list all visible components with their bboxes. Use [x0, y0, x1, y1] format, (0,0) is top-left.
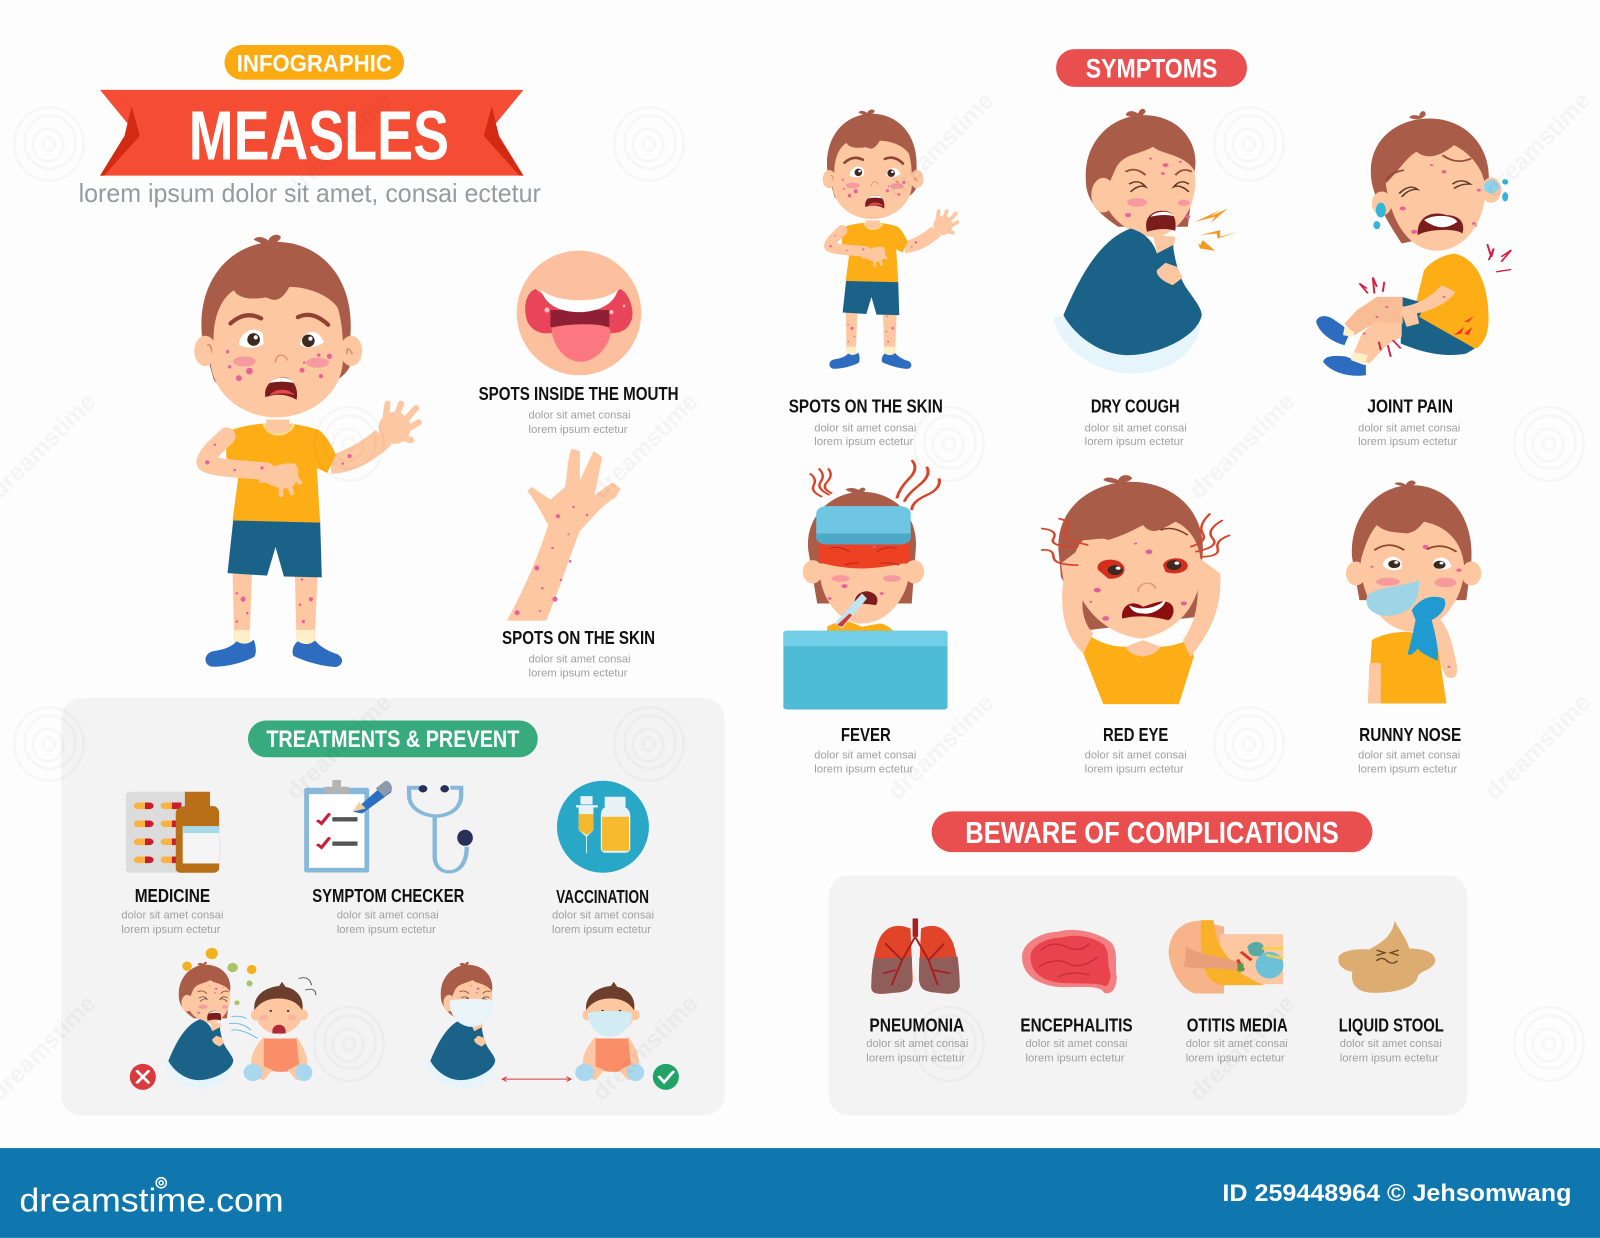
caption: medicine: MEDICINE — [135, 885, 210, 906]
caption: vaccination: dolor sit amet consai — [552, 909, 654, 921]
caption: dry cough: dolor sit amet consai — [1085, 423, 1187, 435]
caption: medicine — [121, 885, 223, 936]
text: dreamstime — [587, 388, 703, 504]
caption: liquid stool — [1339, 1015, 1444, 1064]
icon: symptom checker clipboard and stethoscope — [304, 780, 473, 872]
caption: red eye — [1085, 724, 1187, 776]
caption: liquid stool: dolor sit amet consai — [1340, 1038, 1442, 1050]
symptom illustration: red eye — [1041, 475, 1230, 704]
panel: complications background — [829, 876, 1467, 1115]
caption: spots on the skin symptom: dolor sit amet consai — [814, 423, 916, 435]
caption: symptom checker: dolor sit amet consai — [337, 909, 439, 921]
caption: encephalitis — [1020, 1015, 1133, 1064]
caption: dry cough — [1085, 395, 1187, 448]
caption: encephalitis: dolor sit amet consai — [1026, 1038, 1128, 1050]
caption: red eye: RED EYE — [1103, 724, 1168, 745]
icon: arm with spots — [507, 449, 621, 621]
caption: spots on the skin: dolor sit amet consai — [529, 653, 631, 665]
icon: footer logo spiral — [156, 1178, 166, 1188]
caption: vaccination — [552, 886, 654, 936]
panel: treatments and prevent background — [61, 698, 724, 1115]
caption: otitis media: OTITIS MEDIA — [1187, 1015, 1288, 1036]
caption: spots inside the mouth: SPOTS INSIDE THE MOUTH — [479, 383, 679, 404]
caption: spots on the skin symptom — [789, 395, 943, 448]
symptom illustration: fever — [783, 460, 948, 709]
icon: lungs — [871, 918, 960, 994]
badge: treatments and prevent: TREATMENTS & PREVENT — [266, 726, 519, 753]
caption: spots on the skin — [502, 627, 655, 680]
caption: otitis media: dolor sit amet consai — [1186, 1038, 1288, 1050]
caption: pneumonia — [866, 1015, 968, 1064]
caption: red eye: dolor sit amet consai — [1085, 749, 1187, 761]
caption: runny nose — [1358, 724, 1461, 776]
caption: fever: dolor sit amet consai — [814, 749, 916, 761]
caption: pneumonia: dolor sit amet consai — [866, 1038, 968, 1050]
symptom illustration: spots on the skin — [823, 110, 957, 369]
caption: spots inside the mouth — [479, 383, 679, 436]
badge: beware of complications: BEWARE OF COMPLICATIONS — [965, 816, 1339, 850]
caption: medicine: dolor sit amet consai — [121, 909, 223, 921]
text: dreamstime — [587, 990, 703, 1106]
caption: joint pain — [1358, 395, 1460, 448]
text: dreamstime — [1480, 689, 1596, 805]
caption: joint pain: dolor sit amet consai — [1358, 423, 1460, 435]
caption: runny nose: dolor sit amet consai — [1358, 749, 1460, 761]
badge: infographic: INFOGRAPHIC — [237, 51, 392, 78]
caption: joint pain: JOINT PAIN — [1367, 395, 1453, 416]
caption: encephalitis: lorem ipsum ectetur — [1026, 1052, 1125, 1064]
caption: vaccination: lorem ipsum ectetur — [552, 924, 651, 936]
text: dreamstime — [281, 87, 397, 203]
caption: spots on the skin: SPOTS ON THE SKIN — [502, 627, 655, 648]
caption: dry cough: DRY COUGH — [1091, 395, 1180, 416]
caption: medicine: lorem ipsum ectetur — [121, 924, 221, 936]
badge: symptoms: SYMPTOMS — [1086, 54, 1217, 84]
footer logo: dreamstime.com: dreamstime.com — [19, 1182, 284, 1219]
badge: symptoms — [1056, 49, 1247, 87]
caption: fever: lorem ipsum ectetur — [814, 764, 914, 776]
caption: liquid stool: lorem ipsum ectetur — [1340, 1052, 1439, 1064]
caption: pneumonia: PNEUMONIA — [869, 1015, 964, 1036]
icon: medicine — [126, 792, 219, 873]
caption: liquid stool: LIQUID STOOL — [1339, 1015, 1444, 1036]
caption: runny nose: RUNNY NOSE — [1359, 724, 1461, 745]
subtitle: lorem ipsum dolor sit amet, consai ectetur — [79, 180, 541, 208]
text: dreamstime — [281, 689, 397, 805]
symptom illustration: runny nose — [1346, 480, 1481, 703]
caption: symptom checker — [312, 885, 464, 936]
footer bar — [0, 1148, 1600, 1238]
icon: ear — [1169, 920, 1283, 993]
badge: treatments and prevent — [248, 721, 538, 757]
main boy illustration — [194, 235, 419, 667]
caption: otitis media — [1186, 1015, 1288, 1064]
caption: fever — [814, 724, 916, 776]
text: dreamstime — [883, 87, 999, 203]
caption: spots on the skin symptom: lorem ipsum ectetur — [814, 436, 914, 448]
caption: runny nose: lorem ipsum ectetur — [1358, 764, 1458, 776]
caption: spots on the skin symptom: SPOTS ON THE SKIN — [789, 395, 943, 416]
caption: pneumonia: lorem ipsum ectetur — [866, 1052, 966, 1064]
caption: symptom checker: SYMPTOM CHECKER — [312, 885, 464, 906]
icon: spots inside the mouth — [517, 251, 641, 375]
caption: joint pain: lorem ipsum ectetur — [1358, 436, 1458, 448]
caption: symptom checker: lorem ipsum ectetur — [337, 924, 436, 936]
caption: spots inside the mouth: dolor sit amet consai — [529, 409, 631, 421]
text: dreamstime — [1480, 87, 1596, 203]
caption: fever: FEVER — [841, 724, 891, 745]
icon: liquid stool — [1338, 921, 1435, 993]
caption: dry cough: lorem ipsum ectetur — [1085, 436, 1184, 448]
scene: masked with distance, right — [426, 962, 679, 1090]
symptom illustration: joint pain — [1316, 111, 1511, 376]
scene: coughing near a baby, wrong — [130, 948, 316, 1090]
icon: brain — [1022, 930, 1117, 993]
caption: red eye: lorem ipsum ectetur — [1085, 764, 1184, 776]
text: dreamstime — [1184, 990, 1300, 1106]
symptom illustration: dry cough — [1053, 109, 1239, 373]
caption: encephalitis: ENCEPHALITIS — [1020, 1015, 1133, 1036]
footer credit: ID 259448964 © Jehsomwang — [1222, 1180, 1571, 1207]
icon: vaccination — [557, 781, 649, 873]
text: dreamstime — [1184, 388, 1300, 504]
text: dreamstime — [883, 689, 999, 805]
caption: otitis media: lorem ipsum ectetur — [1186, 1052, 1285, 1064]
caption: spots on the skin: lorem ipsum ectetur — [529, 668, 628, 680]
caption: spots inside the mouth: lorem ipsum ectetur — [529, 424, 628, 436]
title ribbon: measles: MEASLES — [189, 96, 449, 174]
caption: vaccination: VACCINATION — [556, 886, 649, 907]
